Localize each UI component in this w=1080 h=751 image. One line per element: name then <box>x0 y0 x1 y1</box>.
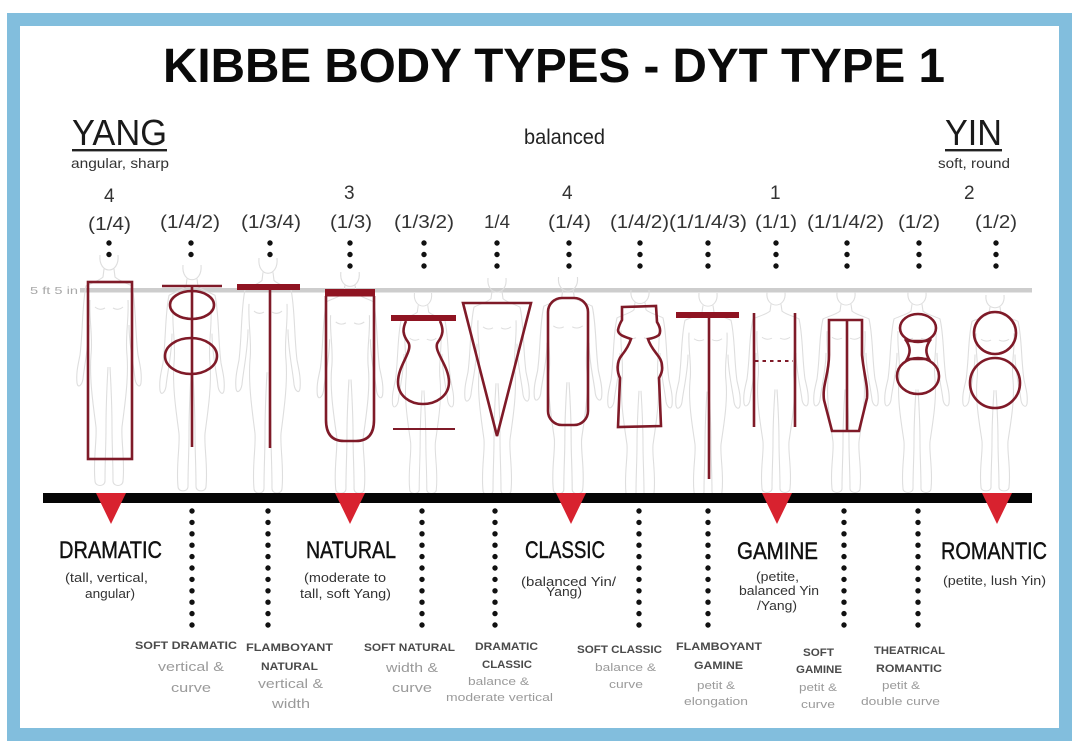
type: dramatic: (tall, vertical, <box>65 570 148 585</box>
subtype: soft dramatic <box>135 640 237 695</box>
subtype: flamboyant gamine <box>676 641 762 708</box>
subtype: flamboyant natural: NATURAL <box>261 661 318 673</box>
body outline: soft natural <box>391 293 456 494</box>
body outline: gamine <box>744 292 808 493</box>
type: gamine: (petite, <box>756 569 799 584</box>
subtype: soft gamine: curve <box>801 699 835 711</box>
scale label: yang <box>71 112 169 171</box>
body outline: classic <box>534 277 602 494</box>
subtype: theatrical romantic: ROMANTIC <box>876 663 942 675</box>
subtype: theatrical romantic: THEATRICAL <box>874 645 945 657</box>
body outline: flamboyant gamine <box>676 293 740 496</box>
black spectrum bar <box>43 493 1032 503</box>
fraction labels: (1/3/4) <box>241 212 301 232</box>
body outline: theatrical romantic <box>885 292 949 493</box>
subtype: soft classic: curve <box>609 679 643 691</box>
subtype: theatrical romantic <box>861 645 945 708</box>
type: gamine: /Yang) <box>757 598 797 613</box>
subtype: flamboyant natural: FLAMBOYANT <box>246 642 333 654</box>
subtype: soft classic: balance & <box>595 662 657 674</box>
scale label: yang: YANG <box>72 112 167 153</box>
day type numbers: 4 <box>562 183 573 204</box>
day type numbers: 2 <box>964 183 975 204</box>
fraction labels: (1/3) <box>330 212 372 232</box>
title: KIBBE BODY TYPES - DYT TYPE 1 <box>163 40 945 93</box>
type: dramatic: angular) <box>85 586 135 601</box>
body outline: soft gamine <box>814 292 878 493</box>
type: gamine: balanced Yin <box>739 583 819 598</box>
day type numbers: 3 <box>344 183 355 204</box>
type: dramatic <box>59 537 162 601</box>
scale label: yin: soft, round <box>938 155 1010 171</box>
type: romantic <box>941 538 1047 588</box>
body outline: soft classic <box>608 290 672 497</box>
subtype: flamboyant gamine: FLAMBOYANT <box>676 641 762 653</box>
fraction labels <box>88 212 1017 234</box>
upper dotted connectors <box>109 243 996 267</box>
subtype: soft gamine: SOFT <box>803 647 834 659</box>
subtype: flamboyant natural: vertical & <box>258 677 324 691</box>
subtype: soft dramatic: SOFT DRAMATIC <box>135 640 237 652</box>
subtype: soft classic: SOFT CLASSIC <box>577 644 662 656</box>
subtype: soft natural <box>364 642 455 695</box>
body outline: dramatic <box>77 255 141 486</box>
subtype: soft dramatic: vertical & <box>158 660 225 674</box>
fraction labels: (1/4/2) <box>160 212 220 232</box>
fraction labels: (1/2) <box>975 212 1017 232</box>
scale label: balanced: balanced <box>524 126 605 149</box>
subtype: soft dramatic: curve <box>171 681 211 695</box>
body outline: romantic <box>963 295 1027 491</box>
subtype: flamboyant gamine: elongation <box>684 696 748 708</box>
body outline: flamboyant natural <box>236 258 300 493</box>
type: gamine <box>737 538 819 613</box>
subtype: soft gamine: GAMINE <box>796 664 842 676</box>
type: classic: Yang) <box>546 584 582 599</box>
type: natural <box>300 537 396 601</box>
subtype: theatrical romantic: petit & <box>882 680 921 692</box>
subtype: dramatic classic: moderate vertical <box>446 692 553 704</box>
fraction labels: (1/4) <box>548 212 591 232</box>
subtype: dramatic classic: balance & <box>468 676 530 688</box>
subtype: soft classic <box>577 644 662 691</box>
body outline: dramatic classic <box>463 278 531 495</box>
subtype: flamboyant gamine: petit & <box>697 680 736 692</box>
type: romantic: ROMANTIC <box>941 538 1047 565</box>
body outline: natural <box>317 272 383 493</box>
scale label: yin: YIN <box>945 112 1002 153</box>
scale label: yang: angular, sharp <box>71 155 169 171</box>
type: natural: NATURAL <box>306 537 396 564</box>
lower dotted connectors <box>192 511 918 627</box>
subtype: soft gamine: petit & <box>799 682 838 694</box>
subtype: flamboyant natural: width <box>271 697 310 711</box>
day type numbers: 4 <box>104 186 115 207</box>
subtype: dramatic classic <box>446 641 553 704</box>
subtype: dramatic classic: CLASSIC <box>482 659 532 671</box>
type: gamine: GAMINE <box>737 538 818 565</box>
subtype: soft natural: SOFT NATURAL <box>364 642 455 654</box>
body outline: soft dramatic <box>160 265 224 491</box>
day type numbers: 1 <box>770 183 781 204</box>
subtype: soft natural: curve <box>392 681 432 695</box>
type: classic <box>521 537 616 599</box>
subtype: soft natural: width & <box>385 661 439 675</box>
fraction labels: (1/2) <box>898 212 940 232</box>
type: natural: tall, soft Yang) <box>300 586 391 601</box>
fraction labels: (1/1/4/2) <box>807 212 884 232</box>
fraction labels: 1/4 <box>484 212 510 232</box>
subtype: flamboyant gamine: GAMINE <box>694 660 743 672</box>
fraction labels: (1/3/2) <box>394 212 454 232</box>
scale label: yin <box>938 112 1010 171</box>
height line at 5 ft 5 in <box>30 285 1032 297</box>
subtype: flamboyant natural <box>246 642 333 711</box>
type: classic: CLASSIC <box>525 537 605 564</box>
subtype: theatrical romantic: double curve <box>861 696 940 708</box>
fraction labels: (1/1/4/3) <box>669 212 747 232</box>
fraction labels: (1/4) <box>88 214 131 234</box>
type: natural: (moderate to <box>304 570 386 585</box>
subtype: soft gamine <box>796 647 842 711</box>
fraction labels: (1/1) <box>755 212 797 232</box>
type: dramatic: DRAMATIC <box>59 537 162 564</box>
fraction labels: (1/4/2) <box>610 212 669 232</box>
height line at 5 ft 5 in: 5 ft 5 in <box>30 285 78 297</box>
red markers <box>96 493 1012 524</box>
type: classic: (balanced Yin/ <box>521 574 616 589</box>
subtype: dramatic classic: DRAMATIC <box>475 641 538 653</box>
type: romantic: (petite, lush Yin) <box>943 573 1046 588</box>
day type numbers <box>104 183 975 207</box>
